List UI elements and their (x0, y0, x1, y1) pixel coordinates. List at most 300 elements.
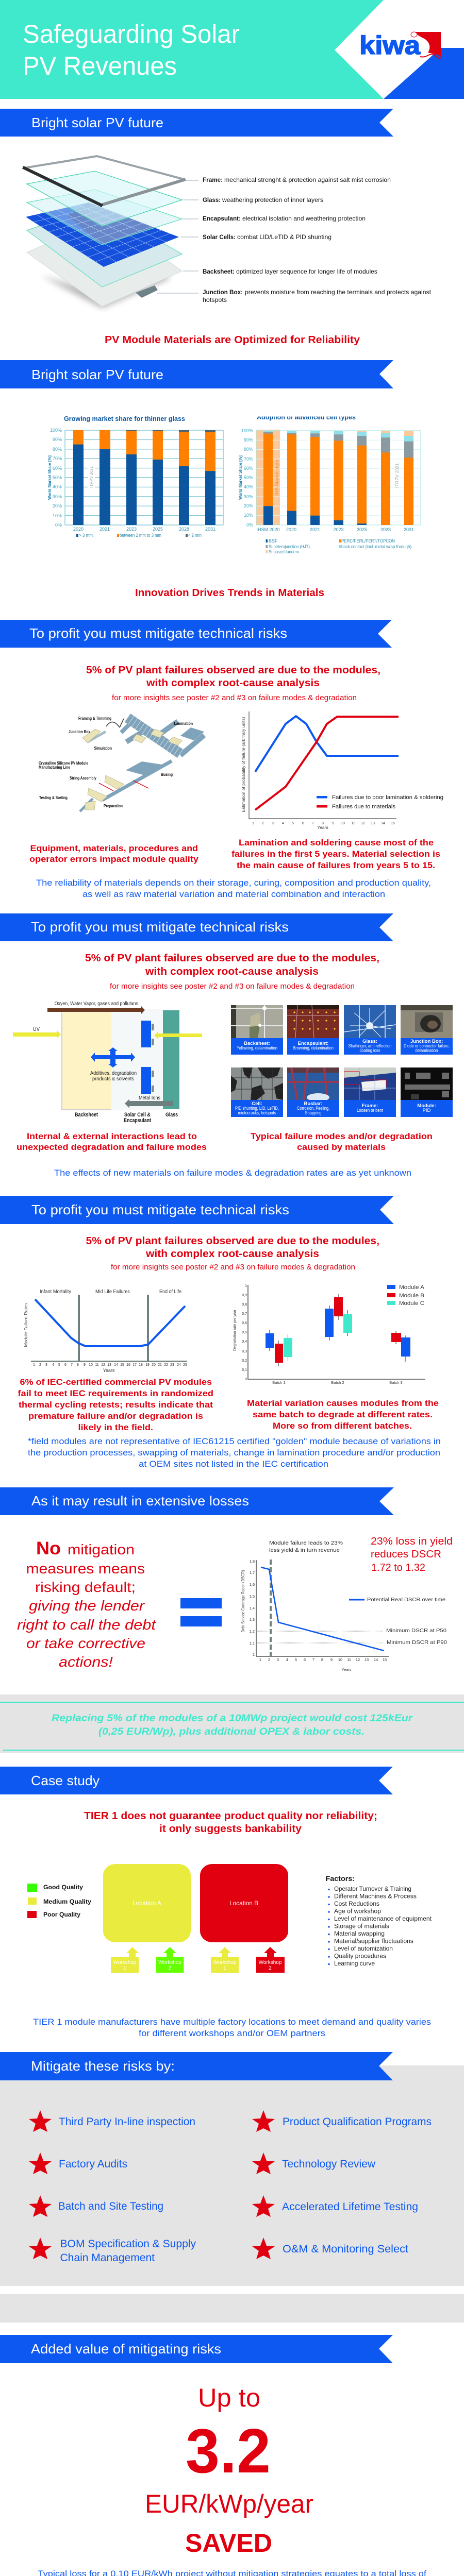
workshop: A2: 2 (169, 1965, 172, 1971)
module layer labels: optimized layer sequence for longer life of modules (236, 268, 377, 275)
exploded PV module illustration (24, 156, 198, 308)
heading: 5% failures 3: with complex root-cause analysis (145, 1248, 319, 1260)
bar chart: advanced cell types: 80% (244, 447, 253, 452)
legend: cell types (266, 538, 411, 554)
legend: failure causes: Failures due to poor lamination & soldering (332, 794, 443, 801)
heading: innovation: Innovation Drives Trends in Materials (135, 587, 324, 599)
line chart: bathtub curve: 4 (52, 1363, 54, 1367)
bar chart: advanced cell types: IHSM 2020 (256, 527, 280, 532)
item: technology review (252, 2153, 376, 2174)
diagram: manufacturing line: Testing & Sorting (39, 795, 68, 800)
line chart: failure probability: 6 (302, 822, 304, 825)
diagram: manufacturing line: Framing & Trimming (78, 716, 111, 721)
caption: equipment (29, 843, 199, 864)
legend: glass thickness: between 2 mm to 3 mm (120, 533, 161, 538)
legend: modules (387, 1284, 425, 1307)
card: busbar: Snapping (305, 1110, 322, 1116)
section banner: bright solar PV future (0, 109, 393, 137)
line chart: DSCR: Module failure leads to 23% (269, 1540, 343, 1546)
line chart: failure probability: 12 (361, 822, 365, 825)
card: junction box: Diode or connector failure, (404, 1043, 450, 1049)
bar chart: advanced cell types: 50% (244, 475, 253, 480)
line chart: bathtub curve: 13 (107, 1363, 111, 1367)
icon: junction box (136, 285, 158, 298)
item: BOM specification (29, 2238, 196, 2264)
candlestick chart: degradation by batch: 0,4 (242, 1340, 247, 1344)
list: factors: Material swapping (334, 1931, 385, 1937)
bar chart: advanced cell types: 0% (246, 522, 253, 528)
list: mitigation measures (29, 2110, 432, 2264)
text: no mitigation: or take corrective (26, 1635, 145, 1651)
line chart: DSCR: 10 (338, 1657, 342, 1662)
line chart: failure probability: 10 (341, 822, 345, 825)
text: effects of new materials: The effects of new materials on failure modes & degradation rates are as yet unknown (54, 1168, 411, 1178)
card: busbar: Busbar: (304, 1101, 322, 1107)
section banner: mitigate these risks: Mitigate these risks by: (31, 2058, 175, 2074)
line chart: bathtub curve: 22 (164, 1363, 168, 1367)
line chart: DSCR: 1,5 (250, 1594, 255, 1599)
heading: 5% failures 2: for more insights see poster #2 and #3 on failure modes & degradation (110, 982, 355, 991)
text: tier 1 manufacturers (33, 2017, 431, 2038)
line chart: bathtub curve (23, 1289, 187, 1373)
card: module (401, 1067, 453, 1117)
card: junction box: Junction Box: (410, 1039, 443, 1044)
line chart: bathtub curve: 5 (58, 1363, 60, 1367)
list: factors: Material/supplier fluctuations (334, 1939, 413, 1945)
line chart: DSCR: 1,3 (250, 1617, 255, 1622)
arrow: oxygen and water vapor: Oxyen, Water Vapor, gases and pollutans (55, 1001, 138, 1007)
line chart: DSCR: 2 (268, 1657, 270, 1662)
caption: interactions: Internal & external interactions lead to (27, 1131, 197, 1141)
bar chart: thinner glass market share: 2021 (100, 527, 110, 532)
bar chart: advanced cell types: 70% (244, 456, 253, 462)
solar cells (26, 202, 179, 267)
legend: cell types: Si-heterojunction (HJT) (269, 544, 310, 549)
logo: kiwa: kiwa (359, 31, 421, 60)
line chart: bathtub curve: 25 (183, 1363, 187, 1367)
bar chart: advanced cell types: 30% (244, 494, 253, 499)
bar chart: thinner glass market share: ITRPV 2021 (89, 466, 94, 488)
text: field modules note: the production processes, swapping of materials, change in lamination procedure and/or production (28, 1448, 440, 1458)
module layer labels: Solar Cells: (203, 233, 236, 241)
caption: typical failure modes: Typical failure modes and/or degradation (251, 1131, 433, 1141)
bar chart: advanced cell types: 2021 (310, 527, 320, 532)
card: backsheet (231, 1005, 283, 1055)
workshop: A2 (156, 1947, 184, 1973)
bar chart: advanced cell types: 2023 (333, 527, 344, 532)
bar chart: advanced cell types: Adoption of advanced cell types (257, 413, 356, 421)
line chart: bathtub curve: 24 (177, 1363, 181, 1367)
diagram: manufacturing line: String Assembly (70, 776, 96, 781)
line chart: DSCR: 7 (312, 1657, 314, 1662)
bar chart: thinner glass market share: World Market Share [%] (47, 455, 52, 500)
key figure: savings: 3.2 (186, 2416, 271, 2486)
caption: material variation: Material variation causes modules from the (247, 1398, 439, 1408)
bar chart: thinner glass market share: 100% (50, 428, 62, 433)
frame (24, 156, 184, 205)
line chart: bathtub curve: 11 (95, 1363, 99, 1367)
card: encapsulant: Browning, delamination (293, 1045, 334, 1051)
title: Safeguarding Solar (23, 20, 240, 48)
card: cell: mictocracks, hotspots (238, 1110, 276, 1116)
workshop: A2: Workshop (158, 1960, 181, 1965)
line chart: failure probability: 1 (252, 822, 254, 825)
workshop: B1 (211, 1947, 239, 1973)
list: factors: Learning curve (334, 1961, 375, 1967)
heading: 5% failures 2: 5% of PV plant failures observed are due to the modules, (85, 953, 379, 964)
bar chart: advanced cell types: 2020 (286, 527, 296, 532)
module layer labels: Junction Box: (203, 289, 243, 296)
arrow: UV right (154, 1031, 202, 1039)
card: backsheet: Backsheet: (244, 1041, 270, 1046)
legend: quality: Poor Quality (43, 1911, 80, 1918)
caption: lamination (231, 838, 440, 870)
line chart: bathtub curve: Module Failure Rates (23, 1303, 28, 1347)
candlestick chart: degradation by batch: 0,6 (242, 1321, 247, 1325)
line chart: bathtub curve: Years (103, 1368, 115, 1373)
line chart: failure probability: 11 (351, 822, 355, 825)
bar chart: thinner glass market share: 2023 (126, 527, 137, 532)
text: field modules note (28, 1436, 441, 1469)
bar chart: advanced cell types: 2031 (404, 527, 414, 532)
line chart: bathtub curve: 21 (158, 1363, 162, 1367)
module layer labels: electrical isolation and weathering protection (242, 215, 366, 222)
item: BOM specification: BOM Specification & Supply (60, 2238, 196, 2250)
item: batch and site testing: Batch and Site Testing (58, 2200, 163, 2212)
caption: lamination: the main cause of failures from years 5 to 15. (237, 860, 435, 870)
bar chart: thinner glass market share: 2025 (153, 527, 163, 532)
caption: equipment: Equipment, materials, procedures and (30, 843, 198, 853)
section banner: case study (0, 1767, 393, 1794)
line chart: DSCR: 12 (356, 1657, 360, 1662)
legend: glass thickness (76, 533, 202, 538)
section banner: extensive losses: As it may result in extensive losses (31, 1493, 249, 1509)
legend: failure causes (317, 794, 443, 810)
item: technology review: Technology Review (282, 2158, 376, 2170)
section banner: added value (0, 2335, 393, 2363)
line chart: failure probability: 15 (391, 822, 395, 825)
list: factors: Storage of materials (334, 1924, 389, 1930)
section banner: mitigate technical risks 1 (0, 620, 392, 648)
line chart: DSCR (241, 1540, 447, 1672)
workshop: B2 (256, 1947, 285, 1973)
caption: IEC-certified modules: likely in the field. (78, 1422, 153, 1432)
key figure: savings: SAVED (185, 2529, 272, 2557)
legend: modules: Module C (399, 1300, 424, 1307)
text: 23% loss in yield (371, 1536, 453, 1573)
bar chart: thinner glass market share: 90% (53, 437, 62, 442)
line chart: DSCR: 1,8 (250, 1559, 255, 1564)
line chart: failure probability: 4 (282, 822, 284, 825)
legend: glass thickness: > 3 mm (79, 533, 93, 538)
line chart: failure probability (241, 711, 443, 830)
arrow: cross diffusion (91, 1047, 135, 1067)
card: junction box: delamination (416, 1048, 438, 1054)
module layer labels: mechanical strenght & protection against salt mist corrosion (224, 176, 391, 183)
line chart: DSCR: 11 (347, 1657, 351, 1662)
legend: cell types: back contact (incl. metal wrap through) (341, 544, 411, 549)
list: factors: Level of automization (334, 1946, 393, 1952)
card: glass: Glass: (362, 1039, 377, 1044)
text: no mitigation: No (36, 1538, 61, 1558)
bar chart: advanced cell types: 10% (244, 513, 253, 518)
bar chart: thinner glass market share: Growing market share for thinner glass (64, 415, 185, 422)
line chart: DSCR: Years (342, 1667, 352, 1672)
candlestick chart: degradation by batch: 0,9 (242, 1294, 247, 1297)
line chart: DSCR: 3 (277, 1657, 279, 1662)
callout: replacing modules cost (0, 1694, 464, 1753)
text: tier 1 manufacturers: TIER 1 module manufacturers have multiple factory locations to meet demand and quality varies (33, 2017, 431, 2027)
diagram: manufacturing line: Junction Box (69, 730, 90, 734)
module layer labels: Encapsulant: (203, 215, 241, 222)
section banner: mitigate technical risks 3: To profit you must mitigate technical risks (31, 1202, 289, 1217)
caption: typical failure modes: caused by materials (297, 1142, 386, 1152)
item: BOM specification: Chain Management (60, 2252, 155, 2264)
heading: 5% failures 1: 5% of PV plant failures observed are due to the modules, (86, 665, 380, 676)
item: accelerated lifetime testing: Accelerated Lifetime Testing (282, 2201, 418, 2213)
heading: 5% failures 3 (86, 1235, 379, 1272)
candlestick chart: degradation by batch: 0,8 (242, 1303, 247, 1307)
line chart: DSCR: 8 (321, 1657, 323, 1662)
line chart: bathtub curve: 23 (170, 1363, 174, 1367)
line chart: bathtub curve: 15 (120, 1363, 124, 1367)
callout: replacing modules cost: Replacing 5% of the modules of a 10MWp project would cost 125kEur (52, 1713, 413, 1724)
caption: lamination: failures in the first 5 years. Material selection is (231, 849, 440, 859)
photo cards: typical failure modes (231, 1005, 453, 1117)
caption: IEC-certified modules (18, 1377, 213, 1432)
card: glass: coating loss (360, 1048, 380, 1054)
line chart: bathtub curve: 9 (84, 1363, 86, 1367)
bar chart: thinner glass market share: 70% (53, 456, 62, 461)
caption: IEC-certified modules: premature failure and/or degradation is (28, 1411, 203, 1421)
caption: equipment: operator errors impact module quality (29, 854, 199, 864)
item: factory audits: Factory Audits (59, 2158, 127, 2170)
text: reliability of materials (36, 878, 431, 899)
line chart: bathtub curve: 7 (71, 1363, 73, 1367)
line chart: DSCR: 14 (374, 1657, 378, 1662)
workshop: A1 (111, 1947, 139, 1973)
heading: 5% failures 2: with complex root-cause analysis (145, 966, 319, 977)
item: O&M monitoring: O&M & Monitoring Select (283, 2243, 408, 2255)
line chart: bathtub curve: End of Life (159, 1289, 181, 1295)
diagram: manufacturing line (39, 716, 204, 811)
legend: quality: Medium Quality (43, 1898, 91, 1905)
header banner (0, 0, 464, 99)
section banner: mitigate technical risks 2 (0, 913, 393, 941)
card: glass (344, 1005, 396, 1055)
card: encapsulant: Encapsulant: (298, 1041, 328, 1046)
diagram: manufacturing line: Busing (161, 772, 173, 777)
bar chart: thinner glass market share: 10% (53, 513, 62, 518)
diagram: manufacturing line: Preparation (104, 804, 123, 808)
module layer labels: combat LID/LeTID & PID shunting (237, 233, 332, 241)
caption: material variation: More so from different batches. (273, 1421, 412, 1431)
bar chart: advanced cell types: 60% (244, 466, 253, 471)
card: module: PID (423, 1108, 431, 1113)
legend: quality: Good Quality (43, 1884, 83, 1891)
card: busbar: Corrosion, Peeling, (297, 1106, 329, 1111)
backsheet layer (27, 217, 182, 307)
logo: kiwa (359, 31, 441, 60)
bar chart: advanced cell types: 2025 (357, 527, 367, 532)
item: third party inspection (29, 2110, 195, 2132)
diagram: internal and external interactions (13, 1001, 202, 1124)
candlestick chart: degradation by batch (233, 1284, 425, 1385)
encapsulant layer upper (27, 190, 182, 245)
line chart: bathtub curve: 16 (126, 1363, 130, 1367)
heading: tier 1 (84, 1810, 377, 1835)
line chart: failure probability: 13 (371, 822, 375, 825)
card: cell (231, 1067, 283, 1117)
key figure: savings: Up to (198, 2383, 260, 2412)
bar chart: advanced cell types (238, 413, 421, 554)
list: factors: Factors: (326, 1874, 355, 1883)
line chart: DSCR: 1,1 (250, 1641, 255, 1646)
line chart: DSCR: 5 (295, 1657, 297, 1662)
line chart: bathtub curve: 3 (45, 1363, 47, 1367)
module layer labels: hotspots (203, 296, 227, 303)
caption: IEC-certified modules: thermal cycling retests; results indicate that (19, 1400, 213, 1410)
line chart: bathtub curve: 10 (89, 1363, 93, 1367)
line chart: DSCR: 1,7 (250, 1570, 255, 1575)
card: busbar (287, 1067, 339, 1117)
arrow: metal ions (125, 1095, 173, 1108)
text: no mitigation: giving the lender (29, 1598, 145, 1614)
card: frame: Loosen or bent (357, 1108, 383, 1113)
heading: 5% failures 1: with complex root-cause analysis (146, 677, 320, 689)
line chart: DSCR: 9 (330, 1657, 333, 1662)
line chart: bathtub curve: 17 (132, 1363, 137, 1367)
line chart: DSCR: 1 (259, 1657, 261, 1662)
caption: IEC-certified modules: fail to meet IEC requirements in randomized (18, 1388, 213, 1398)
text: no mitigation: measures means (26, 1561, 145, 1577)
bar chart: thinner glass market share: 80% (53, 447, 62, 452)
title (23, 20, 240, 80)
key figure: savings: EUR/kWp/year (145, 2489, 313, 2518)
line chart: failure probability: 9 (332, 822, 334, 825)
card: encapsulant (287, 1005, 339, 1055)
bar chart: thinner glass market share: 40% (53, 484, 62, 489)
text: no mitigation: actions! (59, 1654, 113, 1670)
section banner: mitigate technical risks 3 (0, 1196, 394, 1224)
line chart: bathtub curve: 8 (77, 1363, 79, 1367)
labels: layers: Encapsulant (124, 1117, 151, 1124)
line chart: DSCR: 15 (383, 1657, 387, 1662)
line chart: DSCR: Debt Service Coverage Ration (DSCR) (241, 1570, 245, 1632)
arrow: UV left: UV (33, 1026, 40, 1032)
section banner: mitigate these risks (0, 2052, 393, 2080)
candlestick chart: degradation by batch: 0,2 (242, 1359, 247, 1363)
bar chart: advanced cell types: 90% (244, 437, 253, 443)
text: no mitigation: mitigation (68, 1541, 135, 1557)
bar chart: thinner glass market share: 0% (55, 522, 62, 528)
line chart: bathtub curve: 14 (114, 1363, 118, 1367)
section banner: bright solar PV future: Bright solar PV future (31, 115, 163, 130)
bar chart: advanced cell types: 100% (241, 428, 253, 433)
text: additives (90, 1070, 137, 1082)
candlestick chart: degradation by batch: 0 (245, 1378, 247, 1381)
item: product qualification (252, 2110, 432, 2132)
line chart: bathtub curve: 12 (101, 1363, 105, 1367)
line chart: DSCR: 1 (253, 1652, 255, 1657)
section banner: mitigate technical risks 2: To profit you must mitigate technical risks (31, 919, 289, 935)
workshop: B2: 2 (269, 1965, 272, 1971)
candlestick chart: degradation by batch: Degradation rate per year (233, 1310, 237, 1351)
line chart: DSCR: 1,6 (250, 1582, 255, 1587)
caption: material variation: same batch to degrade at different rates. (253, 1410, 433, 1419)
candlestick chart: degradation by batch: 0,5 (242, 1331, 247, 1334)
text: no mitigation: risking default; (35, 1579, 136, 1595)
text: no mitigation: right to call the debt (17, 1617, 156, 1633)
line chart: DSCR: Minimum DSCR at P50 (386, 1628, 446, 1634)
encapsulant layer lower (27, 206, 182, 287)
caption: interactions (16, 1131, 207, 1152)
text: reliability of materials: The reliability of materials depends on their storage, curing, composition and production quality, (36, 878, 431, 888)
panel: mitigation background (0, 2065, 464, 2286)
candlestick chart: degradation by batch: 0,7 (242, 1312, 247, 1316)
module layer labels: Frame: (203, 176, 223, 183)
line chart: failure probability: 5 (292, 822, 294, 825)
diagram: manufacturing line: Manufacturing Line (39, 765, 70, 770)
bar chart: advanced cell types: 20% (244, 503, 253, 509)
panel: gray strip (0, 2294, 464, 2323)
labels: layers: Backsheet (75, 1112, 98, 1118)
diagram: manufacturing line: Simulation (94, 746, 112, 751)
section banner: case study: Case study (31, 1773, 100, 1788)
card: glass: Shattinger, anti-reflection (349, 1043, 392, 1049)
card: frame: Frame: (362, 1103, 378, 1109)
heading: module materials: PV Module Materials are Optimized for Reliability (105, 334, 360, 346)
bar chart: thinner glass market share: 60% (53, 466, 62, 471)
section banner: mitigate technical risks 1: To profit you must mitigate technical risks (29, 625, 287, 641)
bar chart: advanced cell types: 2028 (380, 527, 391, 532)
legend: modules: Module A (399, 1284, 425, 1291)
line chart: failure probability: Estimation of probability of failure (arbitrary units) (241, 717, 246, 812)
caption: interactions: unexpected degradation and failure modes (16, 1142, 207, 1152)
legend: cell types: Si-based tandem (269, 549, 299, 554)
labels: layers: Glass (165, 1112, 178, 1118)
section banner: bright solar PV future 2: Bright solar PV future (31, 367, 163, 382)
workshop: B2: Workshop (259, 1960, 282, 1965)
line chart: bathtub curve: 2 (39, 1363, 41, 1367)
item: factory audits (29, 2153, 127, 2174)
line chart: bathtub curve: 1 (33, 1363, 35, 1367)
legend: cell types: BSF (269, 538, 278, 544)
diagram: manufacturing line: Crystalline Silicone PV Module (39, 761, 88, 766)
workshop: B1: 1 (223, 1965, 226, 1971)
diagram: manufacturing line: Lamination (174, 721, 193, 726)
bar chart: thinner glass market share: 20% (53, 503, 62, 509)
callout: replacing modules cost: (0,25 EUR/Wp), plus additional OPEX & labor costs. (98, 1726, 364, 1737)
item: accelerated lifetime testing (252, 2195, 418, 2217)
module layer labels: Glass: (203, 196, 221, 204)
bar chart: advanced cell types: IHS Markit data (275, 459, 279, 496)
card: junction box (401, 1005, 453, 1055)
caption: material variation (247, 1398, 439, 1431)
bar chart: thinner glass market share: 2020 (73, 527, 84, 532)
line chart: failure probability: 7 (312, 822, 314, 825)
module layer labels: weathering protection of inner layers (222, 196, 323, 204)
candlestick chart: degradation by batch: 0,3 (242, 1350, 247, 1353)
caption: lamination: Lamination and soldering cause most of the (239, 838, 434, 848)
heading: 5% failures 1: for more insights see poster #2 and #3 on failure modes & degradation (112, 693, 357, 702)
line chart: DSCR: 6 (304, 1657, 306, 1662)
line chart: bathtub curve: 6 (64, 1363, 67, 1367)
list: factors: Operator Turnover & Training (334, 1886, 411, 1892)
bar chart: thinner glass market share: 2028 (179, 527, 189, 532)
caption: IEC-certified modules: 6% of IEC-certified commercial PV modules (20, 1377, 212, 1387)
line chart: DSCR: Minimum DSCR at P90 (387, 1639, 447, 1646)
